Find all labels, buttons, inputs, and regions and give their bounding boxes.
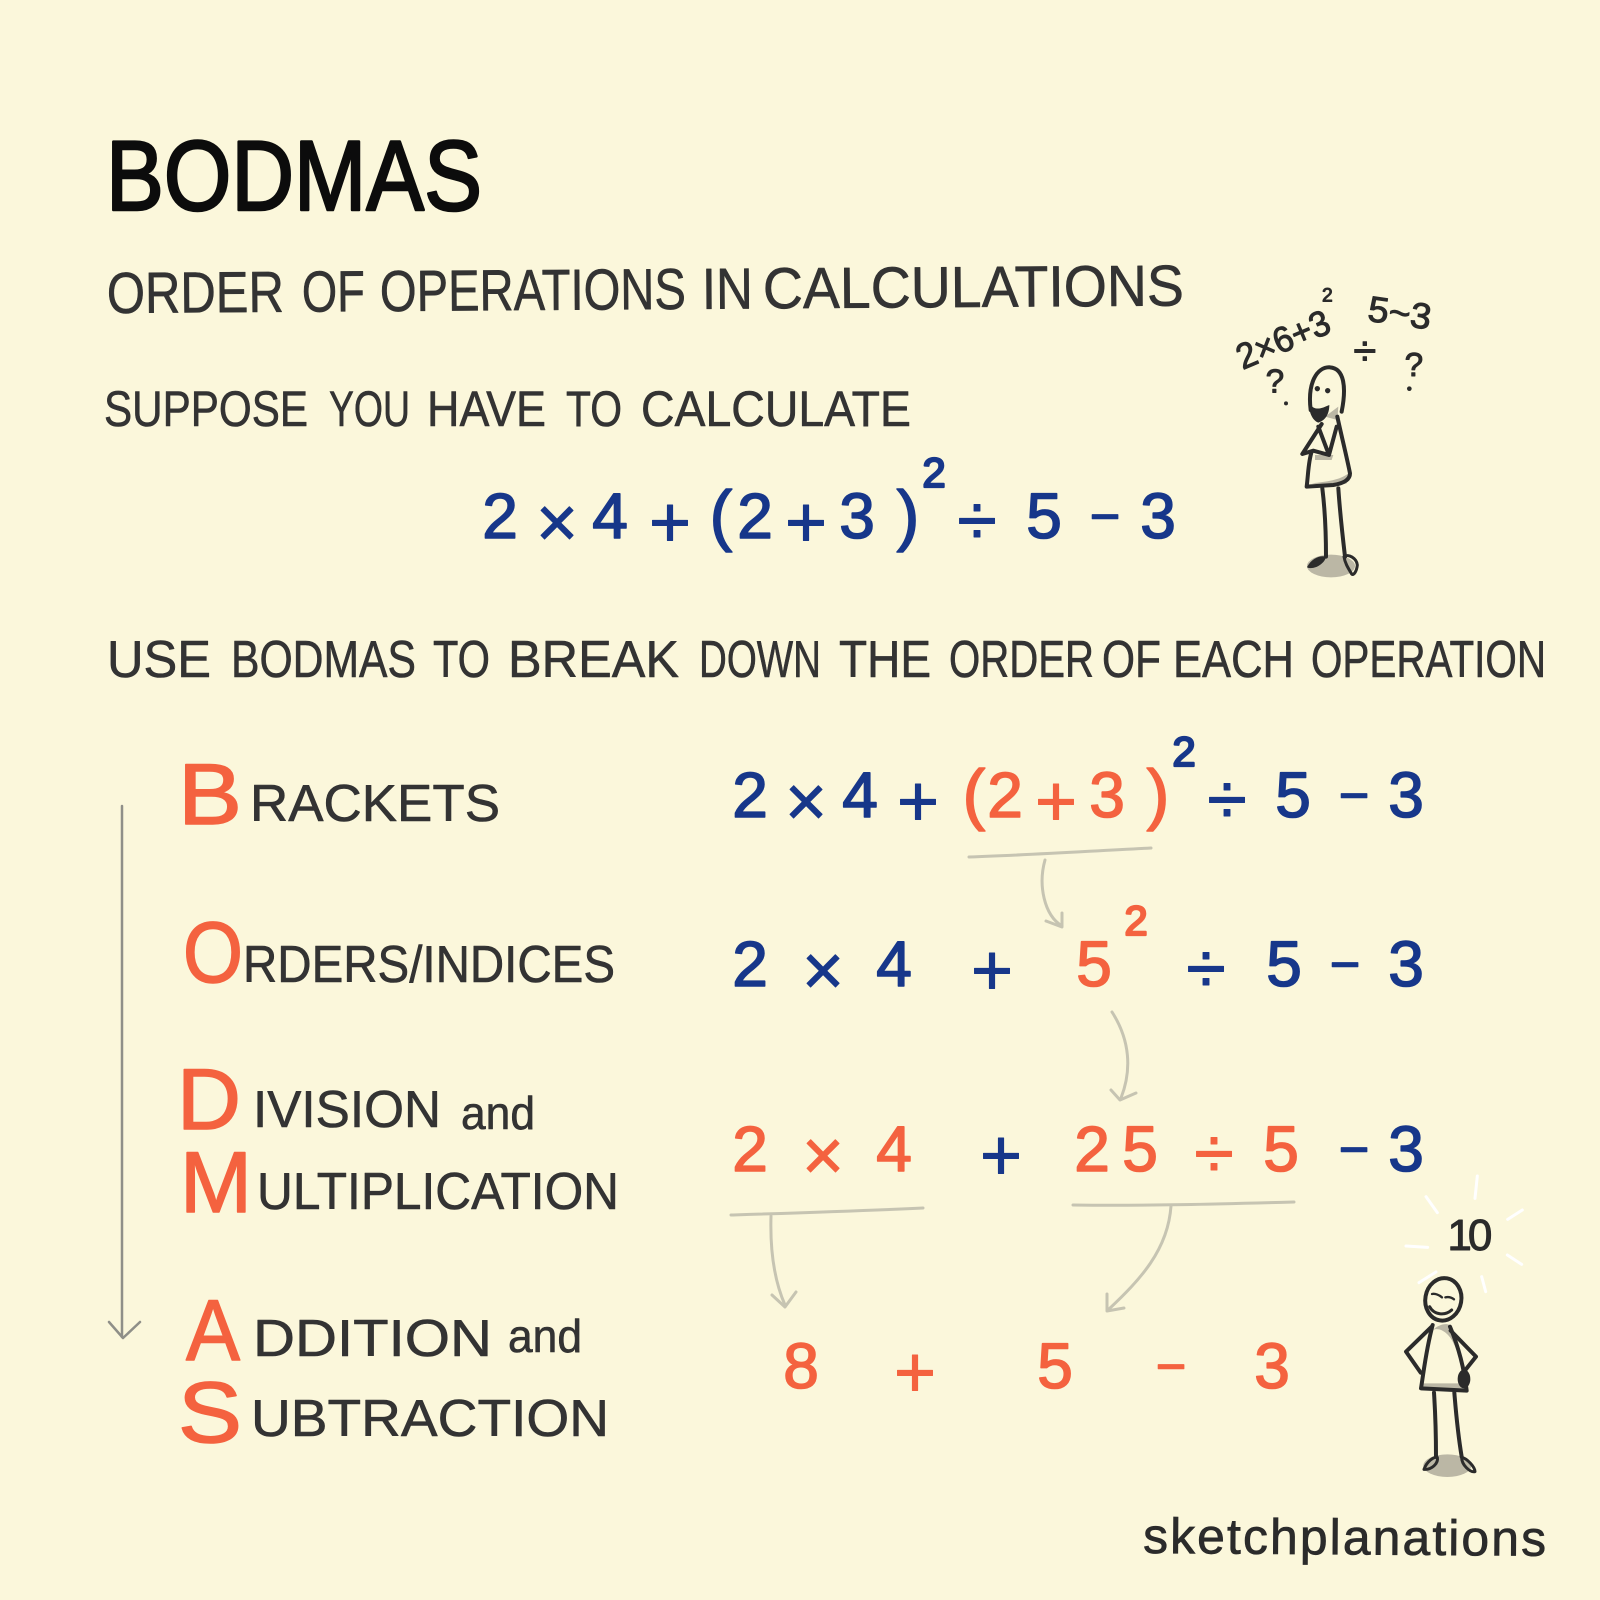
equation row: brackets: 2: [1172, 728, 1196, 775]
instruction heading: USE: [107, 631, 211, 689]
intro text: TO: [566, 381, 622, 437]
main equation: 3: [1140, 480, 1176, 552]
equation row: brackets: 3: [1388, 759, 1424, 831]
equation row: orders: ×: [802, 931, 844, 1011]
equation row: division and multiplication: 5: [1122, 1113, 1158, 1185]
arrow: orders to division: [1111, 1012, 1136, 1100]
intro text: CALCULATE: [641, 381, 911, 437]
equation row: brackets: +: [897, 762, 939, 842]
label: addition and subtraction: [178, 1283, 609, 1461]
intro text: SUPPOSE: [104, 381, 308, 437]
main equation: 2: [737, 480, 773, 552]
arrow: order of steps: [109, 806, 140, 1338]
main equation: +: [785, 483, 827, 563]
equation row: division and multiplication: 5: [1263, 1113, 1299, 1185]
thought: divide sign: ÷: [1353, 327, 1376, 374]
subtitle: OPERATIONS: [380, 257, 686, 324]
equation row: brackets: (: [963, 756, 986, 832]
main equation: 2: [922, 449, 946, 496]
label: brackets: B: [178, 747, 242, 843]
equation row: addition and subtraction: 5: [1037, 1330, 1073, 1402]
instruction heading: [107, 631, 1546, 689]
instruction heading: BODMAS: [231, 631, 416, 689]
instruction heading: OF: [1102, 631, 1161, 689]
equation row: orders: ÷: [1186, 929, 1226, 1009]
answer: 10: [1447, 1211, 1492, 1260]
equation row: division and multiplication: +: [980, 1116, 1022, 1196]
equation row: brackets: 4: [842, 759, 878, 831]
label: orders/indices: RDERS/INDICES: [243, 936, 615, 994]
equation row: orders: +: [971, 931, 1013, 1011]
label: addition and subtraction: S: [178, 1365, 242, 1461]
label: addition and subtraction: UBTRACTION: [251, 1390, 609, 1448]
label: addition and subtraction: and: [508, 1310, 582, 1362]
equation row: orders: −: [1330, 936, 1360, 994]
thought: question mark right: ?: [1405, 347, 1423, 384]
subtitle: OF: [302, 259, 365, 325]
main equation: +: [649, 483, 691, 563]
intro text: [104, 381, 911, 437]
label: division and multiplication: and: [461, 1087, 535, 1139]
label: brackets: RACKETS: [250, 775, 500, 833]
intro text: YOU: [329, 381, 410, 437]
instruction heading: TO: [433, 631, 490, 689]
title: BODMAS: [106, 120, 482, 231]
main equation: ): [897, 477, 919, 553]
equation row: orders: 5: [1266, 928, 1302, 1000]
underline and arrow: brackets to orders: [969, 848, 1151, 927]
underlines and arrows: division to addition: [731, 1202, 1294, 1311]
label: addition and subtraction: A: [186, 1283, 241, 1379]
instruction heading: DOWN: [699, 631, 821, 689]
equation row: division and multiplication: 2: [1074, 1113, 1110, 1185]
main equation: 4: [592, 480, 628, 552]
main equation: ÷: [957, 481, 997, 561]
equation row: division and multiplication: 4: [876, 1113, 912, 1185]
label: division and multiplication: IVISION: [253, 1081, 441, 1139]
main equation: 3: [839, 480, 875, 552]
equation row: orders: 2: [1124, 897, 1148, 944]
equation row: orders: 2: [732, 928, 768, 1000]
main equation: 2: [482, 480, 518, 552]
equation row: division and multiplication: −: [1339, 1121, 1369, 1179]
equation row: brackets: 5: [1275, 759, 1311, 831]
label: addition and subtraction: DDITION: [253, 1310, 492, 1368]
equation row: brackets: ×: [785, 762, 827, 842]
thought: second sum: 5~3: [1366, 288, 1434, 337]
label: orders/indices: [183, 905, 615, 1001]
equation row: division and multiplication: 3: [1388, 1113, 1424, 1185]
equation row: division and multiplication: ÷: [1194, 1114, 1234, 1194]
equation row: brackets: 3: [1089, 759, 1125, 831]
label: orders/indices: O: [183, 905, 243, 1001]
equation row: addition and subtraction: 3: [1254, 1330, 1290, 1402]
equation row: brackets: +: [1035, 762, 1077, 842]
equation row: orders: 4: [876, 928, 912, 1000]
equation row: division and multiplication: ×: [802, 1116, 844, 1196]
signature: sketchplanations: [1143, 1508, 1546, 1567]
thought: squared: 2: [1322, 286, 1333, 307]
intro text: HAVE: [427, 381, 546, 437]
label: division and multiplication: ULTIPLICATION: [257, 1163, 619, 1221]
label: division and multiplication: M: [180, 1135, 252, 1231]
instruction heading: EACH: [1173, 631, 1294, 689]
equation row: addition and subtraction: −: [1156, 1338, 1186, 1396]
main equation: 5: [1026, 480, 1062, 552]
instruction heading: ORDER: [949, 631, 1094, 689]
thought: question mark left: ?: [1266, 363, 1284, 400]
equation row: addition and subtraction: +: [894, 1333, 936, 1413]
subtitle: ORDER: [107, 260, 284, 326]
label: division and multiplication: D: [177, 1052, 241, 1148]
equation row: division and multiplication: 2: [732, 1113, 768, 1185]
thought: first sum: 2×6+3: [1230, 301, 1336, 377]
equation row: brackets: 2: [987, 759, 1023, 831]
equation row: addition and subtraction: 8: [783, 1330, 819, 1402]
equation row: orders: 5: [1076, 928, 1112, 1000]
equation row: brackets: ÷: [1207, 760, 1247, 840]
equation row: brackets: −: [1339, 767, 1369, 825]
instruction heading: BREAK: [508, 631, 679, 689]
main equation: (: [710, 477, 733, 553]
equation row: brackets: 2: [732, 759, 768, 831]
subtitle: CALCULATIONS: [763, 253, 1184, 321]
subtitle: IN: [702, 256, 753, 322]
label: division and multiplication: [177, 1052, 619, 1231]
figure: happy person with answer 10: [1406, 1176, 1522, 1477]
equation row: brackets: ): [1147, 756, 1169, 832]
rays: [1406, 1176, 1522, 1292]
instruction heading: THE: [839, 631, 931, 689]
equation row: orders: 3: [1388, 928, 1424, 1000]
label: brackets: [178, 747, 500, 843]
main equation: −: [1090, 488, 1120, 546]
subtitle: [107, 253, 1184, 326]
main equation: ×: [536, 483, 578, 563]
figure: puzzled person thinking: [1230, 286, 1434, 577]
